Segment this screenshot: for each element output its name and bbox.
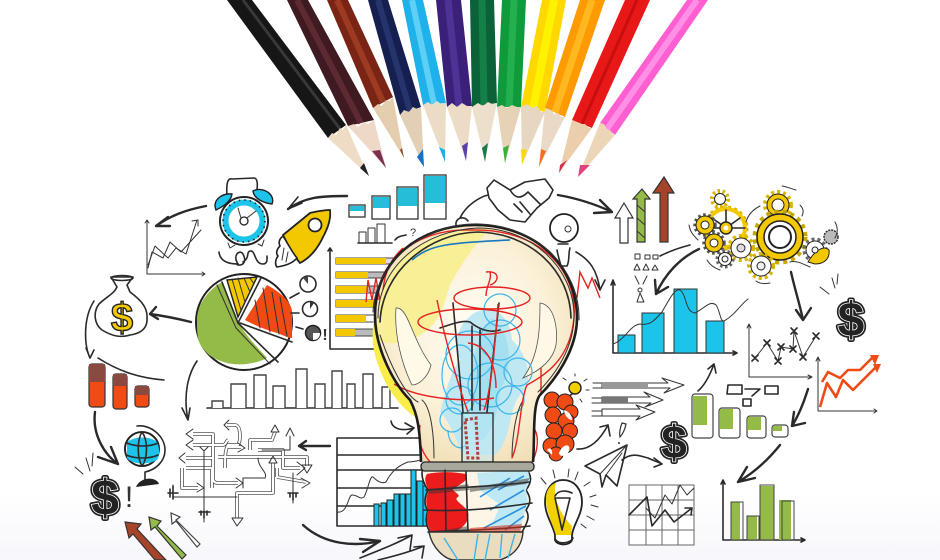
icon: alarm clock <box>215 178 273 265</box>
bulb black outline <box>373 224 579 462</box>
chart: grid line chart <box>629 485 694 545</box>
gear: small top <box>712 191 728 207</box>
icon: dollar and exclamation left <box>75 453 133 526</box>
chart: green bars <box>721 480 805 542</box>
gear: grey small <box>824 230 838 244</box>
gear: large spoked <box>706 208 746 248</box>
gear: right pair <box>804 239 829 264</box>
icon: dollar right <box>820 274 865 347</box>
coloured pencils fan <box>227 0 708 177</box>
icon: dollar right: $ <box>838 294 865 347</box>
icon: small magnifier figure <box>550 214 605 290</box>
icon: handshake <box>456 179 612 225</box>
icon: flow boxes <box>727 385 778 406</box>
base: blue hatch patch <box>477 470 530 530</box>
bulb glass <box>375 225 577 462</box>
arrow: red chart to green cylinders <box>792 389 808 426</box>
bulb inner washes <box>378 228 557 455</box>
icon: red cylinders <box>86 301 149 464</box>
gear: main big <box>755 212 805 262</box>
icon: small idea bulb <box>563 374 589 402</box>
base: red paint patch <box>425 472 468 533</box>
icon: orange brain <box>543 392 610 461</box>
pencil: black <box>227 0 369 176</box>
gear: top of main <box>765 192 791 218</box>
pencil: navy <box>368 0 424 167</box>
chart: grey bar row <box>207 369 398 408</box>
pencil: orange <box>539 0 605 167</box>
icon: dollar and exclamation left: $ <box>91 470 119 526</box>
icon: three small pie dials: ! <box>322 327 328 344</box>
icon: dollar lower right: $ <box>661 416 687 468</box>
gear: right of spoked <box>729 236 753 260</box>
arrows: below the grid chart <box>303 421 424 560</box>
arrows: white, green and brown up arrows <box>615 177 674 243</box>
chart: yellow horizontal bars <box>328 248 400 349</box>
chart: scatter crosses <box>747 324 819 379</box>
pencil: purple <box>436 0 472 161</box>
gear: left yellow <box>695 215 715 235</box>
icon: dollar lower right: $ <box>661 416 687 468</box>
bulb blue scribbles <box>440 294 532 448</box>
icon: striped arrows <box>592 378 684 420</box>
pencil: brown <box>327 0 404 158</box>
icon: dollar and exclamation left: ! <box>125 481 133 514</box>
icon: green cylinders <box>692 364 788 438</box>
icon: yellow idea bulb <box>541 469 598 544</box>
chart: red trend lines <box>816 355 881 413</box>
icon: main light bulb <box>366 224 600 560</box>
chart: cyan bar and curve chart <box>611 280 748 355</box>
pencil: pink <box>578 0 708 177</box>
icon: paper plane <box>585 423 662 487</box>
icon: three small pie dials <box>290 276 328 344</box>
chart: mini cyan bars <box>349 175 446 243</box>
chart: pie <box>196 274 292 370</box>
pencil: sky blue <box>402 0 446 162</box>
icon: money bag <box>95 276 191 340</box>
arrow: pie to network <box>182 361 197 420</box>
bulb red scribbles <box>366 230 600 462</box>
chart: grid with cyan bars <box>337 438 430 526</box>
bulb filament <box>422 303 522 462</box>
chart: top-left line chart <box>145 206 206 276</box>
icon: people pyramid <box>634 245 699 302</box>
gear: lower centre <box>749 254 773 278</box>
icon: curved line under money bag <box>98 358 164 380</box>
icon: globe <box>125 426 165 487</box>
pencil: maroon <box>287 0 386 168</box>
icon: rocket <box>276 210 330 267</box>
pencil: red <box>559 0 650 173</box>
arrow: cylinders to green bars <box>738 445 780 482</box>
lamp screw base <box>421 462 534 560</box>
pencil: dark green <box>470 0 497 162</box>
arrow: mini bars to rocket <box>288 196 347 209</box>
chart: mini cyan bars: ? <box>410 227 416 239</box>
pencil: green <box>497 0 526 163</box>
icon: dollar right: $ <box>838 294 865 347</box>
arrow: gears to scatter <box>791 272 811 320</box>
gear: small white <box>717 251 733 267</box>
diagram: maze network arrows <box>168 420 330 526</box>
pencil: yellow <box>521 0 566 165</box>
gear: lower yellow <box>704 233 724 253</box>
bulb yellow wash <box>373 247 445 418</box>
arrows: white, green, brown up-left <box>125 513 200 560</box>
icon: gears cluster <box>689 186 838 284</box>
icon: dollar and exclamation left: $ <box>91 470 119 526</box>
icon: money bag: $ <box>111 296 133 340</box>
